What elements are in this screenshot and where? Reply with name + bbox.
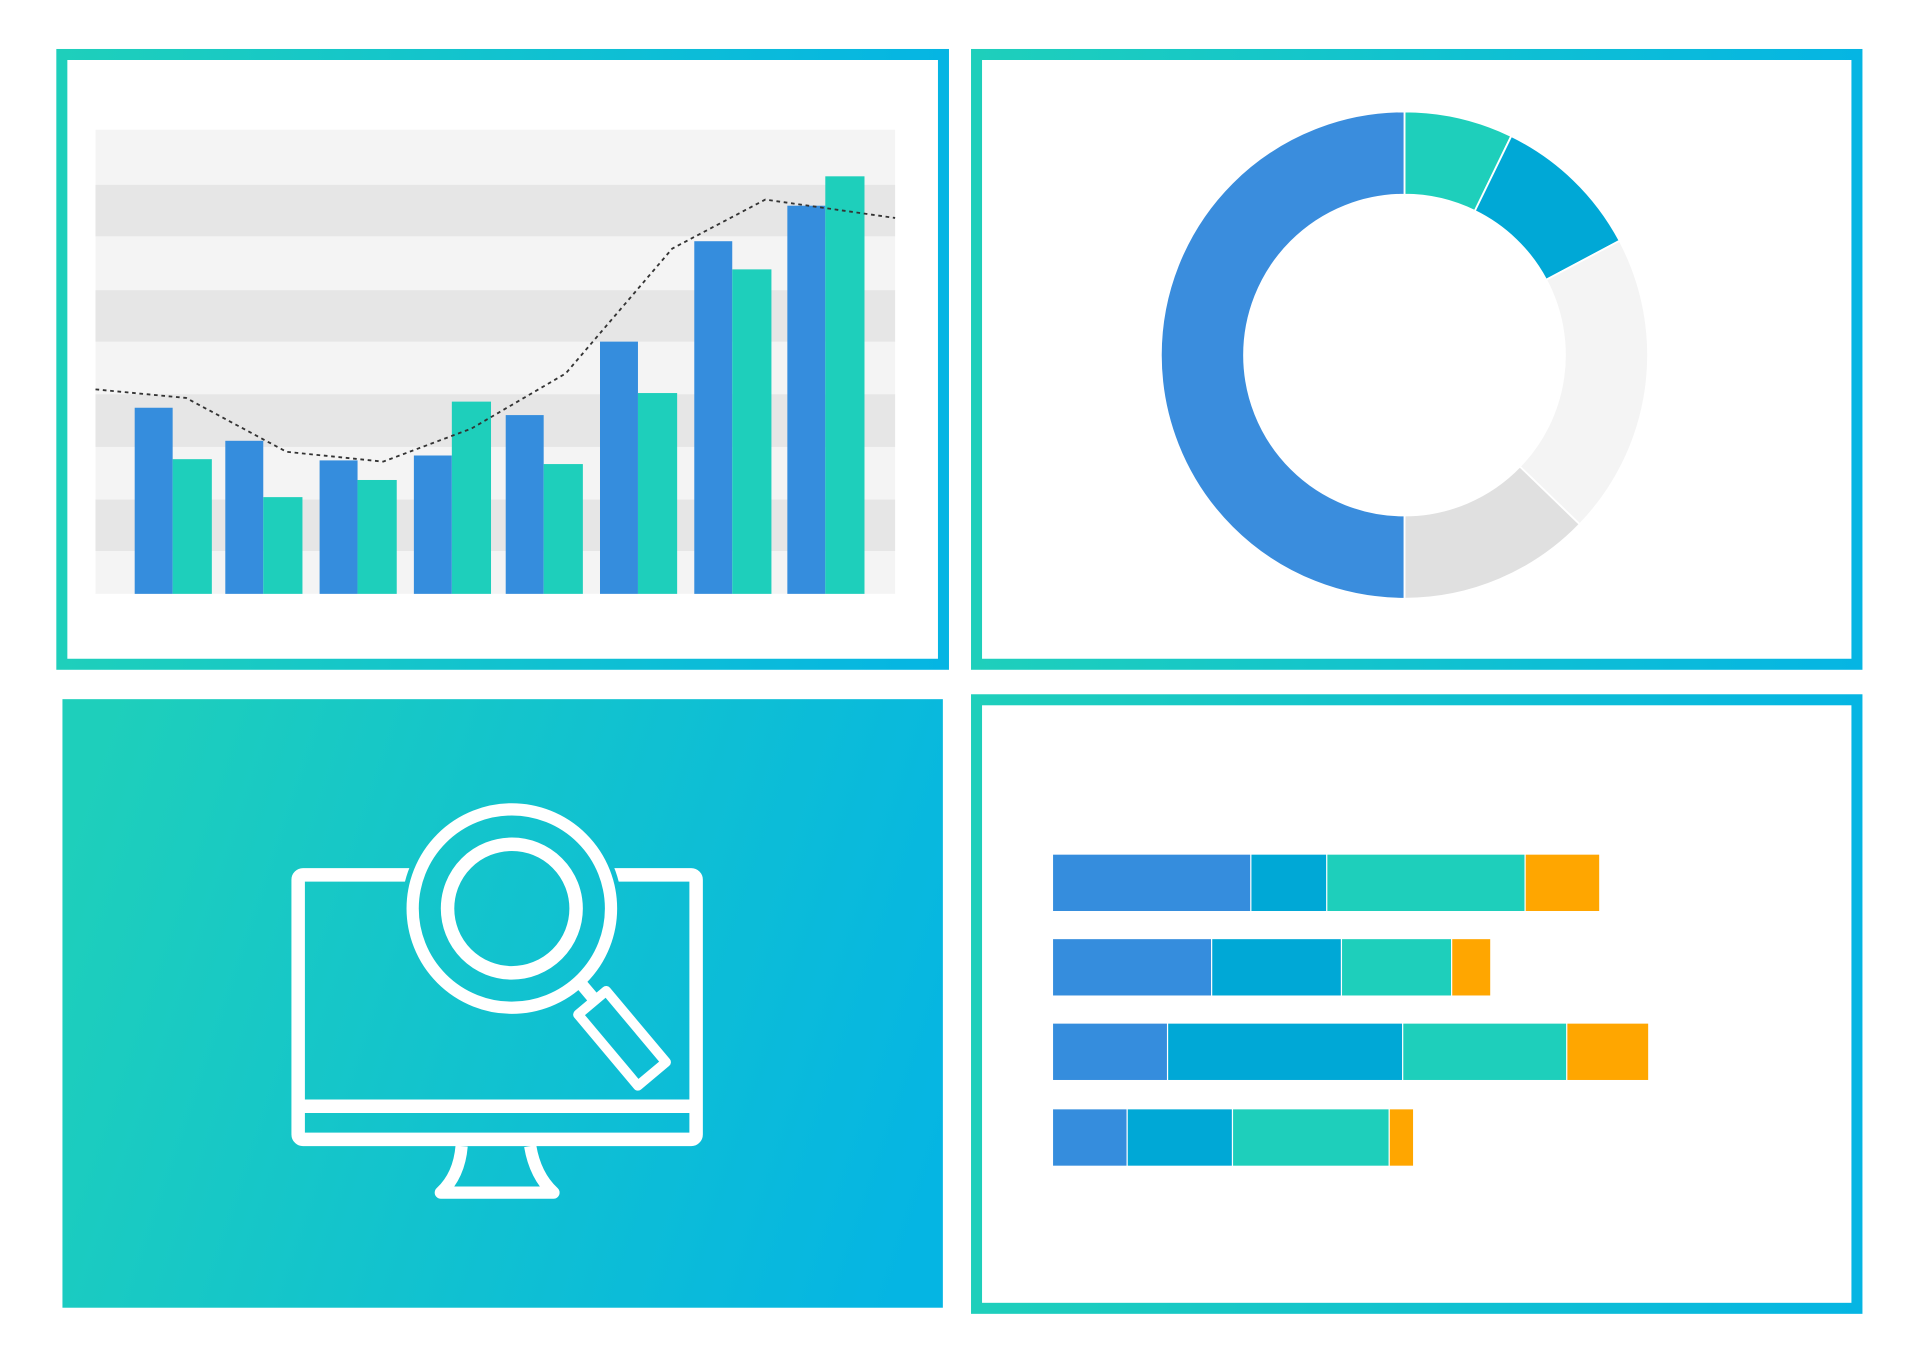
- panel: stacked bars: [977, 700, 1857, 1308]
- stacked bar rows: [1053, 855, 1648, 1166]
- chart background stripes: [96, 130, 895, 594]
- panel: icon monitor search: [62, 699, 943, 1308]
- panel: donut chart: [977, 54, 1857, 664]
- bars: [135, 176, 864, 594]
- trend line: [96, 200, 895, 462]
- icon: magnifier: [402, 798, 666, 1086]
- donut: [1161, 111, 1648, 599]
- icon: monitor: [298, 875, 696, 1193]
- panel: bar chart: [62, 54, 943, 664]
